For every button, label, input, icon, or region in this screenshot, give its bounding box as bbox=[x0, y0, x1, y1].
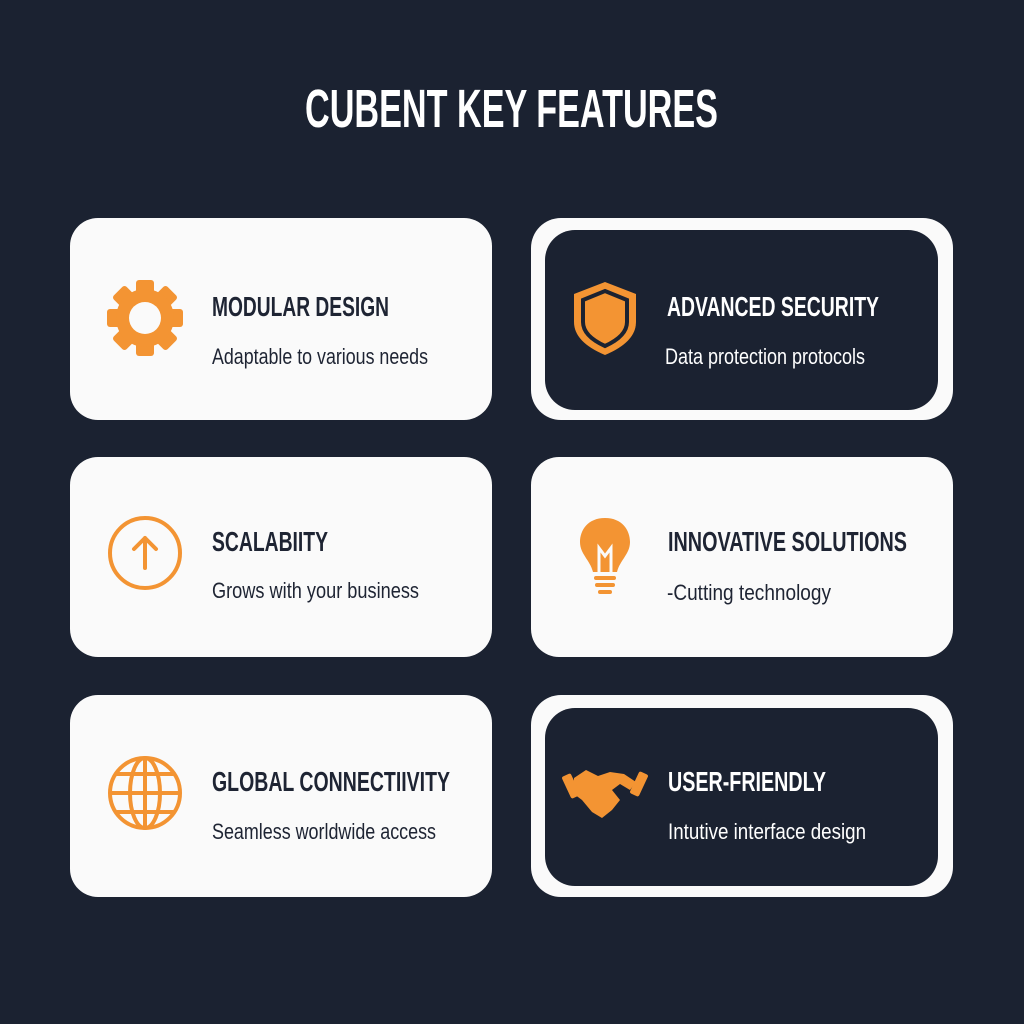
panel: innovative solutions: INNOVATIVE SOLUTIONS bbox=[668, 526, 907, 557]
panel: user-friendly bbox=[531, 695, 953, 897]
panel: user-friendly: USER-FRIENDLY bbox=[668, 766, 826, 797]
icon: handshake bbox=[561, 770, 649, 818]
icon: up arrow circle bbox=[110, 518, 180, 588]
panel: scalability bbox=[70, 457, 492, 657]
panel: global connectivity bbox=[70, 695, 492, 897]
icon: gear bbox=[107, 280, 183, 356]
panel: global connectivity: Seamless worldwide access bbox=[212, 819, 436, 844]
panel: advanced security: ADVANCED SECURITY bbox=[667, 291, 879, 322]
panel: scalability: Grows with your business bbox=[212, 578, 419, 603]
panel: scalability: SCALABIITY bbox=[212, 526, 328, 557]
icon: light bulb bbox=[580, 518, 630, 594]
icon: shield bbox=[574, 282, 636, 355]
icon: globe bbox=[110, 758, 180, 828]
panel: advanced security bbox=[531, 218, 953, 420]
panel: modular design: Adaptable to various needs bbox=[212, 344, 428, 369]
panel: modular design: MODULAR DESIGN bbox=[212, 291, 389, 322]
panel: global connectivity: GLOBAL CONNECTIIVITY bbox=[212, 766, 450, 797]
title: CUBENT KEY FEATURES bbox=[305, 79, 718, 139]
panel: modular design bbox=[70, 218, 492, 420]
panel: innovative solutions: -Cutting technology bbox=[667, 580, 831, 605]
panel: user-friendly: Intutive interface design bbox=[668, 819, 866, 844]
panel: advanced security: Data protection protocols bbox=[665, 344, 865, 369]
panel: innovative solutions bbox=[531, 457, 953, 657]
